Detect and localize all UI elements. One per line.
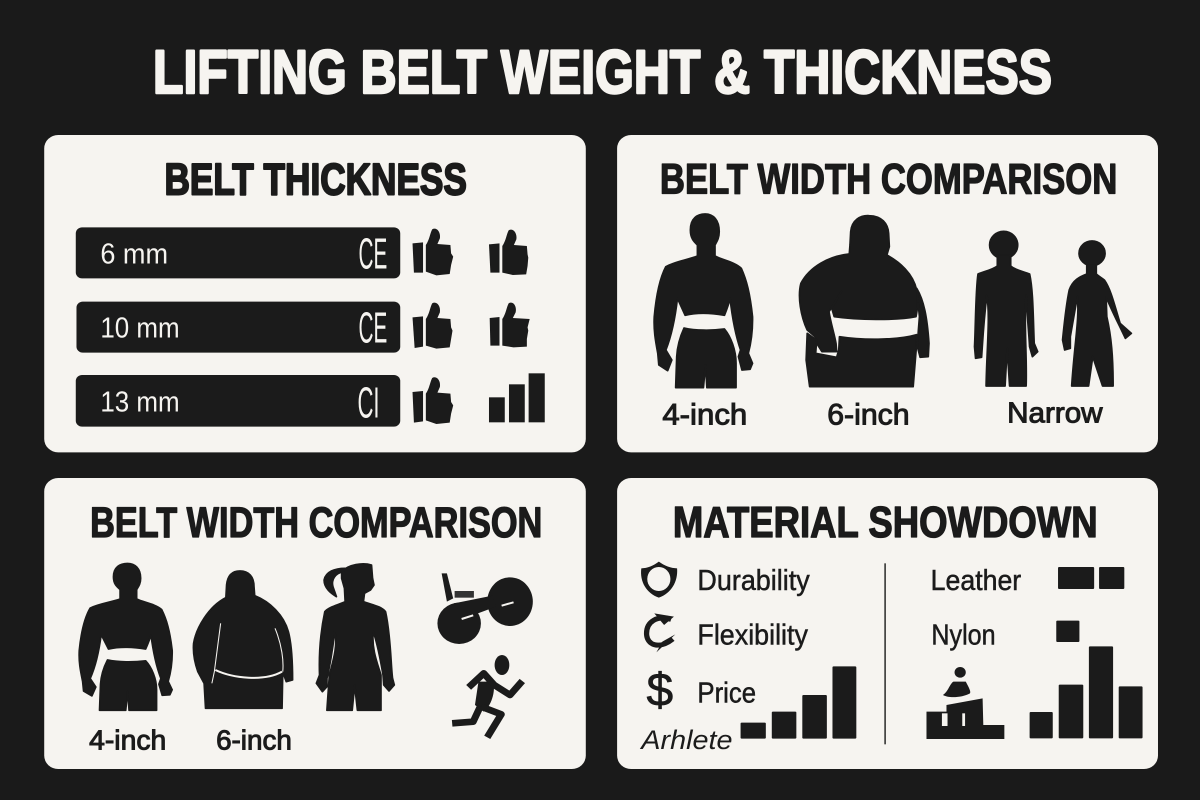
row: 13 mm [76, 375, 400, 427]
heading: belt width comparison: BELT WIDTH COMPARISON [90, 499, 542, 547]
leather rating blocks [1058, 567, 1124, 589]
icon: athlete on podium [926, 667, 1004, 739]
row: 10 mm [76, 302, 400, 353]
row: 13 mm: CI [357, 379, 380, 427]
icon: dollar: $ [647, 665, 673, 716]
label: flexibility: Flexibility [697, 619, 808, 651]
label: leather: Leather [931, 565, 1021, 597]
panel: belt thickness [44, 135, 586, 452]
figure: muscular 4-inch [654, 214, 753, 388]
row: 6 mm [76, 227, 400, 278]
figure: large person [193, 571, 293, 708]
bar chart: right [1030, 646, 1143, 738]
nylon rating block [1056, 621, 1079, 642]
figure: muscular man [79, 563, 172, 710]
figure: woman with ponytail [316, 564, 394, 710]
label: nylon: Nylon [931, 619, 996, 651]
icon: thumbs up row 2 left [413, 303, 453, 349]
row: 6 mm: CE [358, 231, 387, 278]
icon: thumbs up row 2 right [490, 303, 530, 347]
figure: narrow person one [975, 231, 1038, 386]
heading: material showdown: MATERIAL SHOWDOWN [673, 499, 1098, 547]
label: narrow: Narrow [1007, 397, 1103, 429]
heading: belt thickness: BELT THICKNESS [165, 154, 467, 204]
icon: thumbs up row 3 [413, 377, 453, 424]
row: 10 mm: CE [358, 305, 387, 352]
figure: narrow person two [1063, 241, 1131, 386]
panel: belt width comparison bottom [44, 478, 586, 769]
panel: belt width comparison top [617, 135, 1158, 452]
icon: rising bars [489, 373, 545, 422]
label: 4-inch: 4-inch [89, 725, 166, 756]
icon: thumbs up row 1 left [413, 229, 453, 275]
figure: large 6-inch [800, 216, 929, 387]
icon: runner [452, 655, 522, 737]
icon: dumbbell equipment [437, 573, 533, 644]
icon: thumbs up row 1 right [489, 230, 528, 275]
label: 6-inch: 6-inch [216, 725, 292, 756]
icon: shield [641, 562, 677, 598]
row: 13 mm: 13 mm [100, 386, 180, 418]
panel: material showdown [617, 478, 1158, 769]
bar chart: left [741, 666, 856, 739]
label: 6-inch: 6-inch [827, 399, 910, 431]
label: athlete: Arhlete [639, 725, 733, 755]
label: durability: Durability [697, 565, 810, 597]
icon: flexibility arrows [647, 613, 675, 652]
row: 6 mm: 6 mm [100, 238, 168, 270]
label: price: Price [697, 677, 756, 709]
label: 4-inch: 4-inch [662, 399, 747, 431]
row: 10 mm: 10 mm [100, 312, 180, 344]
